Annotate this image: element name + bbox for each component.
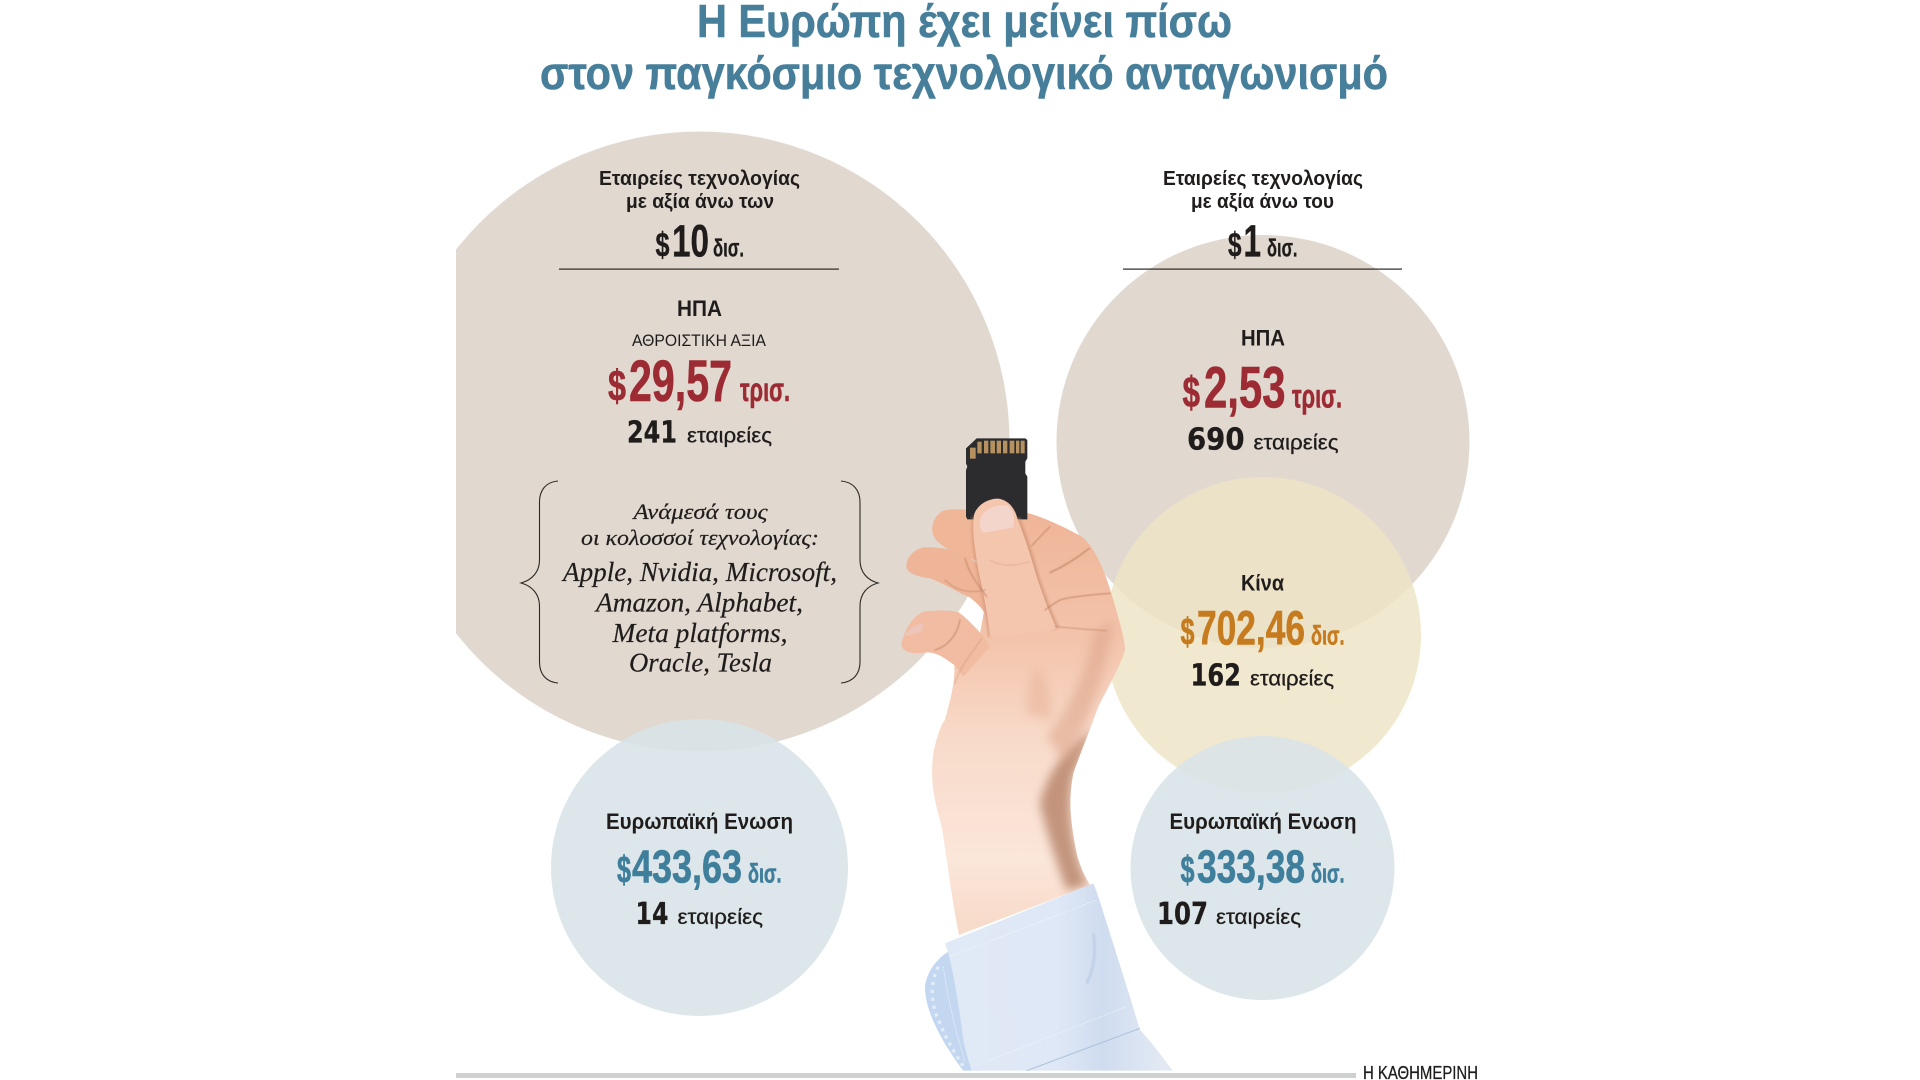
shirt back cuff bbox=[925, 952, 980, 1071]
header: companies over $1bn: 1 bbox=[1244, 216, 1261, 266]
panel text: USA over $10bn: ΑΘΡΟΙΣΤΙΚΗ ΑΞΙΑ bbox=[632, 332, 766, 350]
photo: hand holding a memory card bbox=[901, 438, 1173, 1071]
header: companies over $1bn: Εταιρείες τεχνολογίας bbox=[1163, 168, 1363, 190]
panel text: EU over $10bn: 14 bbox=[636, 897, 668, 932]
header: companies over $10bn: 10 bbox=[672, 216, 709, 266]
finger: pinky bbox=[901, 611, 990, 677]
shirt cuff bbox=[945, 883, 1173, 1071]
bottom rule bbox=[456, 1073, 1356, 1078]
finger: ring bbox=[906, 547, 997, 623]
circle: EU, companies over $10bn bbox=[551, 719, 848, 1016]
panel text: EU over $10bn: Ευρωπαϊκή Ενωση bbox=[606, 809, 793, 834]
panel text: USA over $1bn: εταιρείες bbox=[1254, 432, 1338, 454]
brace: left bbox=[521, 481, 558, 683]
text block: tech giants bbox=[561, 499, 837, 678]
header: companies over $10bn: $ bbox=[656, 226, 670, 264]
circle: EU, companies over $1bn bbox=[1130, 736, 1394, 1000]
panel text: China: 702,46 bbox=[1197, 602, 1305, 656]
header: companies over $10bn: με αξία άνω των bbox=[626, 191, 774, 213]
text block: tech giants: οι κολοσσοί τεχνολογίας: bbox=[581, 525, 819, 550]
panel text: EU over $1bn: 333,38 bbox=[1197, 840, 1305, 892]
header: companies over $1bn: με αξία άνω του bbox=[1191, 191, 1334, 213]
thumb nail bbox=[980, 505, 1014, 533]
panel text: China: 162 bbox=[1190, 658, 1241, 694]
header: companies over $1bn bbox=[1123, 168, 1402, 270]
panel text: EU over $1bn: δισ. bbox=[1311, 858, 1344, 888]
pinky nail bbox=[904, 623, 923, 637]
panel text: EU over $10bn: $ bbox=[617, 850, 631, 892]
knuckle creases bbox=[935, 527, 1110, 683]
panel text: USA over $10bn: ΗΠΑ bbox=[677, 296, 722, 321]
text block: tech giants: Meta platforms, bbox=[611, 618, 788, 648]
panel text: USA over $10bn: $ bbox=[608, 362, 626, 411]
panel text: China bbox=[1180, 570, 1344, 694]
brace: right bbox=[841, 481, 878, 683]
text block: tech giants: Oracle, Tesla bbox=[629, 648, 772, 678]
thumb shadow on fingers bbox=[1017, 518, 1057, 628]
panel text: China: $ bbox=[1180, 612, 1194, 654]
panel text: EU over $1bn: εταιρείες bbox=[1216, 906, 1301, 929]
panel text: EU over $10bn: 433,63 bbox=[632, 840, 742, 892]
memory card bbox=[966, 438, 1027, 519]
circle: USA, companies over $10bn bbox=[456, 132, 1010, 742]
header: companies over $10bn bbox=[559, 168, 839, 270]
back cuff texture bbox=[932, 967, 963, 1067]
panel text: USA over $1bn bbox=[1182, 326, 1342, 458]
text block: tech giants: Apple, Nvidia, Microsoft, bbox=[561, 557, 837, 587]
title bbox=[540, 0, 1388, 99]
panel text: USA over $10bn: εταιρείες bbox=[687, 424, 772, 448]
header: companies over $1bn: $ bbox=[1228, 226, 1242, 264]
finger: upper bbox=[932, 509, 980, 562]
panel text: USA over $1bn: 2,53 bbox=[1204, 356, 1286, 420]
panel text: EU over $1bn: 107 bbox=[1157, 897, 1208, 932]
header: companies over $10bn: Εταιρείες τεχνολογίας bbox=[599, 168, 800, 190]
circle: USA, companies over $1bn bbox=[1056, 235, 1470, 648]
panel text: EU over $10bn: δισ. bbox=[748, 858, 782, 888]
thumb shadow left bbox=[974, 517, 990, 637]
panel text: USA over $10bn bbox=[608, 296, 790, 450]
panel text: USA over $1bn: 690 bbox=[1187, 422, 1244, 458]
title: στον παγκόσμιο τεχνολογικό ανταγωνισμό bbox=[540, 47, 1388, 99]
panel text: EU over $1bn: $ bbox=[1180, 850, 1194, 892]
panel text: USA over $10bn: τρισ. bbox=[740, 371, 790, 408]
panel text: China: εταιρείες bbox=[1250, 668, 1334, 690]
circle: China bbox=[1105, 477, 1421, 793]
panel text: China: δισ. bbox=[1311, 620, 1344, 650]
text block: tech giants: Ανάμεσά τους bbox=[631, 499, 769, 524]
panel text: USA over $1bn: ΗΠΑ bbox=[1241, 326, 1285, 350]
panel text: EU over $1bn: Ευρωπαϊκή Ενωση bbox=[1170, 809, 1356, 834]
panel text: EU over $1bn bbox=[1157, 809, 1356, 932]
header: companies over $1bn: δισ. bbox=[1267, 234, 1298, 262]
header: companies over $10bn: δισ. bbox=[713, 234, 744, 262]
panel text: USA over $10bn: 29,57 bbox=[629, 349, 732, 414]
panel text: EU over $10bn bbox=[606, 809, 793, 932]
text block: tech giants: Amazon, Alphabet, bbox=[594, 588, 803, 618]
panel text: USA over $1bn: $ bbox=[1182, 368, 1200, 418]
panel text: USA over $10bn: 241 bbox=[627, 416, 677, 450]
panel text: USA over $1bn: τρισ. bbox=[1292, 378, 1342, 414]
panel text: EU over $10bn: εταιρείες bbox=[678, 906, 763, 929]
cuff stitching and fold bbox=[943, 900, 1127, 1062]
thumb bbox=[973, 499, 1057, 637]
panel text: China: Κίνα bbox=[1241, 570, 1284, 596]
arm and palm bbox=[932, 513, 1125, 935]
